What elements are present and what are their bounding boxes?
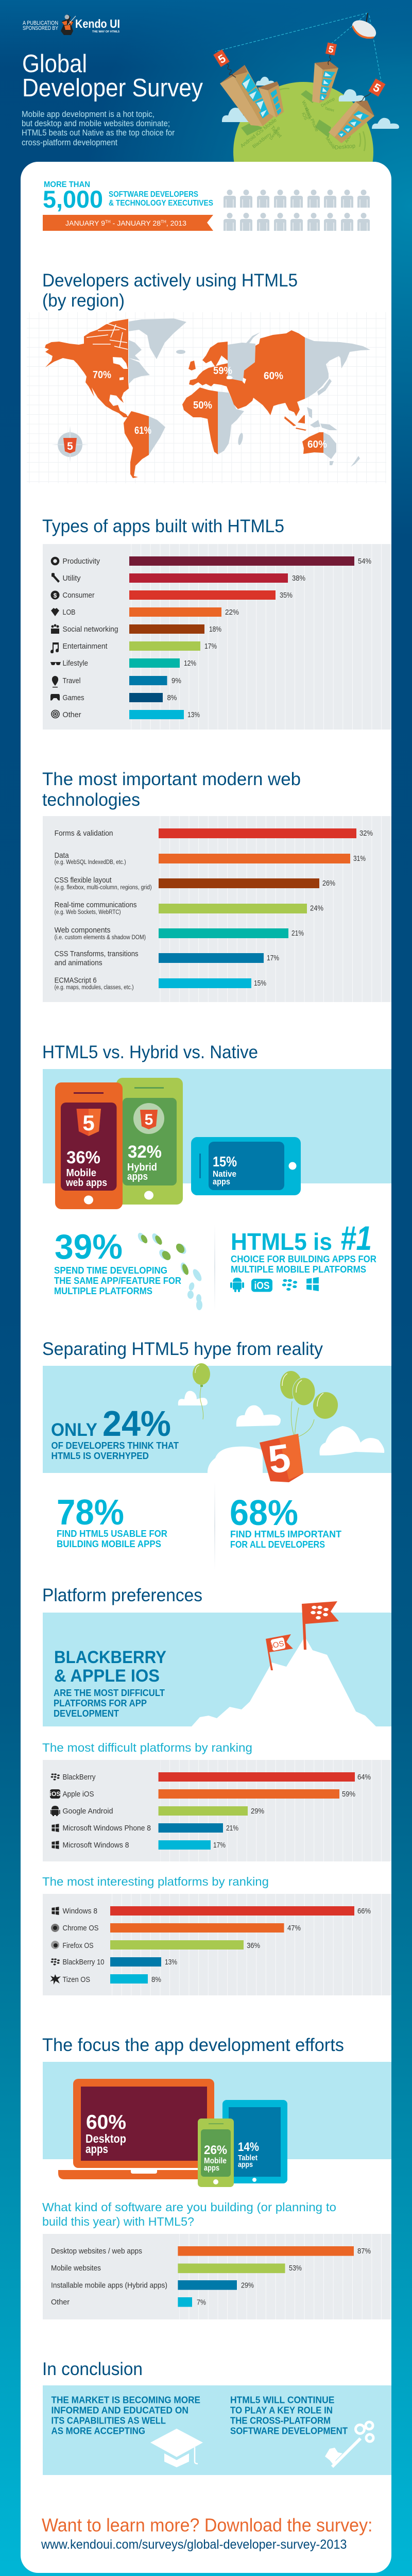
survey stat: 5,000 respondents: 5,000 bbox=[43, 185, 103, 213]
region percentages: 50% bbox=[193, 400, 212, 411]
bar chart: web technologies: 17% bbox=[267, 954, 279, 962]
bar chart: web technologies: 31% bbox=[353, 854, 366, 863]
conclusion text: right: TO PLAY A KEY ROLE IN bbox=[230, 2405, 333, 2415]
bar chart: kind of software: Mobile websites bbox=[51, 2264, 101, 2273]
HTML5 tags: 5 bbox=[328, 44, 335, 55]
call to action bbox=[41, 2514, 373, 2552]
tablet: tablet apps: 14% bbox=[238, 2140, 259, 2154]
planet: iOS bbox=[301, 112, 309, 121]
bar chart: most difficult platforms: Apple iOS bbox=[63, 1790, 94, 1799]
bar chart: most difficult platforms: 64% bbox=[357, 1773, 371, 1782]
bar chart: web technologies: (e.g. WebSQL IndexedDB, etc.) bbox=[55, 859, 126, 866]
sponsor logo: header bbox=[23, 14, 120, 35]
bar chart: kind of software: 7% bbox=[197, 2298, 206, 2307]
bars bbox=[129, 556, 354, 719]
phone: mobile apps: 26% bbox=[204, 2143, 227, 2157]
heading: focus of app development: The focus the app development efforts bbox=[42, 2035, 344, 2055]
survey stat: 5,000 respondents: SOFTWARE DEVELOPERS bbox=[109, 190, 198, 199]
divider bbox=[214, 1482, 215, 1570]
bar chart: most interesting platforms: Windows 8 bbox=[63, 1907, 97, 1916]
grey regions bbox=[129, 318, 370, 467]
phone: hybrid apps: Hybrid bbox=[127, 1162, 157, 1173]
values bbox=[167, 557, 371, 719]
bar chart: types of apps bbox=[43, 544, 391, 730]
intro text: cross-platform development bbox=[22, 138, 117, 147]
phone: hybrid apps: apps bbox=[127, 1171, 148, 1182]
HTML5 tags: 5 bbox=[371, 81, 383, 95]
category labels: Utility bbox=[63, 574, 81, 583]
icon: iOS: iOS bbox=[254, 1280, 270, 1292]
card bottom bbox=[21, 2524, 391, 2573]
text: blackberry and apple iOS: PLATFORMS FOR APP bbox=[54, 1698, 147, 1708]
stat: 68%: FOR ALL DEVELOPERS bbox=[230, 1539, 325, 1550]
planet: Windows Phone bbox=[301, 100, 320, 132]
conclusion text: right: THE CROSS-PLATFORM bbox=[230, 2415, 331, 2426]
stat: 39% multi-platform: MULTIPLE PLATFORMS bbox=[54, 1286, 152, 1296]
bar chart: kind of software: Other bbox=[51, 2298, 70, 2307]
phone: native apps: 15% bbox=[213, 1154, 237, 1170]
conclusion text: left: AS MORE ACCEPTING bbox=[52, 2426, 145, 2436]
values: 38% bbox=[292, 574, 305, 583]
compass HTML5 badge: 5 bbox=[67, 440, 73, 452]
values: 35% bbox=[280, 591, 293, 600]
bar chart: web technologies: Web components bbox=[55, 926, 111, 935]
date banner: , 2013 bbox=[166, 219, 186, 227]
bar chart: most difficult platforms bbox=[43, 1760, 391, 1861]
stat: HTML5 is #1: MULTIPLE MOBILE PLATFORMS bbox=[231, 1264, 366, 1275]
bar chart: web technologies: (i.e. custom elements & shadow DOM) bbox=[55, 935, 146, 941]
satellite links bbox=[215, 13, 381, 81]
heading: modern web technologies bbox=[42, 769, 301, 810]
region percentages: 70% bbox=[93, 369, 111, 381]
values: 13% bbox=[187, 710, 200, 719]
tablet: tablet apps bbox=[222, 2100, 287, 2183]
flag: iOS: iOS bbox=[270, 1639, 285, 1651]
balloon: small bbox=[193, 1363, 210, 1419]
phone: hybrid apps bbox=[116, 1078, 183, 1205]
HTML5 tags: 5 bbox=[216, 52, 228, 66]
subheading: what kind of software bbox=[42, 2200, 336, 2228]
building: large left bbox=[220, 65, 273, 126]
phone: mobile apps: apps bbox=[204, 2164, 219, 2173]
bar chart: web technologies: (e.g. flexbox, multi-column, regions, grid) bbox=[55, 885, 152, 891]
subheading: what kind of software: What kind of software are you building (or planning to bbox=[42, 2200, 336, 2214]
category labels: Other bbox=[63, 710, 81, 719]
bar chart: kind of software: 87% bbox=[357, 2247, 371, 2256]
category labels: Lifestyle bbox=[63, 659, 88, 668]
bar chart: web technologies: Data bbox=[55, 851, 69, 860]
building: centre bbox=[312, 61, 338, 103]
conclusion text: left: INFORMED AND EDUCATED ON bbox=[52, 2405, 188, 2415]
values: 22% bbox=[225, 608, 239, 617]
conclusion text: right: SOFTWARE DEVELOPMENT bbox=[230, 2426, 348, 2436]
survey stat: 5,000 respondents: MORE THAN bbox=[44, 180, 90, 189]
platform icons bbox=[230, 1277, 319, 1292]
planet: Desktop bbox=[320, 96, 336, 108]
category labels: Entertainment bbox=[63, 642, 108, 651]
values: 9% bbox=[171, 676, 181, 685]
category labels: Social networking bbox=[63, 625, 118, 634]
stat: HTML5 is #1 bbox=[231, 1219, 376, 1275]
icon: blackberry bbox=[282, 1279, 297, 1291]
text: blackberry and apple iOS: & APPLE IOS bbox=[54, 1666, 160, 1686]
icon: key bbox=[325, 2422, 373, 2467]
balloons with HTML5 shield bbox=[260, 1371, 340, 1482]
panel: difficult platforms bbox=[43, 1613, 391, 1726]
bar chart: web technologies: 15% bbox=[254, 979, 266, 988]
values: 17% bbox=[204, 642, 217, 651]
region percentages bbox=[93, 365, 327, 450]
bar chart: most difficult platforms: Microsoft Windows 8 bbox=[63, 1841, 129, 1850]
call to action: www.kendoui.com/surveys/global-developer-survey-2013 bbox=[41, 2537, 347, 2552]
conclusion text: right bbox=[230, 2395, 348, 2436]
stat: 39% multi-platform: 39% bbox=[55, 1227, 123, 1266]
clouds bbox=[222, 77, 399, 129]
title bbox=[22, 50, 203, 102]
springs bbox=[227, 55, 371, 101]
main white card bbox=[21, 162, 391, 512]
bar chart: web technologies: 26% bbox=[322, 879, 335, 888]
heading: platform preferences: Platform preferences bbox=[42, 1585, 202, 1605]
stat: HTML5 is #1: #1 bbox=[340, 1219, 372, 1257]
conclusion text: left: ITS CAPABILITIES AS WELL bbox=[52, 2415, 166, 2426]
phone: hybrid apps: 5 bbox=[145, 1111, 153, 1128]
values: 8% bbox=[167, 693, 177, 702]
bar chart: most interesting platforms: 13% bbox=[165, 1958, 177, 1967]
bar chart: most interesting platforms: Firefox OS bbox=[63, 1941, 94, 1950]
text: blackberry and apple iOS: ARE THE MOST DIFFICULT bbox=[54, 1688, 165, 1698]
date banner: TH bbox=[105, 219, 111, 224]
stat: 39% multi-platform bbox=[54, 1227, 181, 1296]
world map bbox=[27, 312, 386, 483]
building: small left bbox=[258, 81, 284, 117]
planet: Tablet bbox=[324, 107, 334, 113]
call to action: Want to learn more? Download the survey: bbox=[42, 2514, 373, 2536]
bar chart: kind of software: 53% bbox=[289, 2264, 302, 2273]
people icons bbox=[224, 190, 370, 231]
category labels: Travel bbox=[63, 676, 80, 685]
bar chart: most interesting platforms: Chrome OS bbox=[63, 1924, 99, 1933]
conclusion text: left bbox=[52, 2395, 200, 2436]
bar chart: kind of software: Installable mobile apps (Hybrid apps) bbox=[51, 2281, 167, 2290]
stat: 39% multi-platform: THE SAME APP/FEATURE FOR bbox=[54, 1276, 181, 1286]
bar chart: kind of software: Desktop websites / web apps bbox=[51, 2247, 142, 2256]
heading: developers by region: (by region) bbox=[42, 291, 125, 311]
conclusion text: left: THE MARKET IS BECOMING MORE bbox=[52, 2395, 200, 2405]
bar chart: most difficult platforms: BlackBerry bbox=[63, 1773, 96, 1782]
icons bbox=[50, 558, 61, 718]
text: only 24%: 24% bbox=[102, 1403, 171, 1444]
survey stat: 5,000 respondents bbox=[43, 180, 213, 213]
planet: Android bbox=[344, 129, 355, 144]
intro text: Mobile app development is a hot topic, bbox=[22, 109, 154, 119]
building: right bbox=[329, 100, 374, 143]
date banner: - JANUARY 28 bbox=[111, 219, 161, 227]
bar chart: most interesting platforms: 8% bbox=[151, 1975, 161, 1984]
conclusion text: right: HTML5 WILL CONTINUE bbox=[230, 2395, 335, 2405]
bar chart: web technologies: 32% bbox=[359, 829, 373, 838]
heading: in conclusion: In conclusion bbox=[42, 2359, 143, 2379]
icon: android bbox=[230, 1278, 244, 1292]
bar chart: most difficult platforms: Microsoft Windows Phone 8 bbox=[63, 1824, 151, 1833]
tablet: tablet apps: Tablet bbox=[238, 2154, 258, 2162]
icon: graduation cap bbox=[150, 2429, 203, 2467]
panel: development focus bbox=[43, 2062, 391, 2159]
bar chart: most difficult platforms: 59% bbox=[342, 1790, 355, 1799]
intro text bbox=[22, 109, 175, 147]
phone: mobile web apps: 5 bbox=[82, 1111, 95, 1135]
heading: hype vs reality: Separating HTML5 hype from reality bbox=[42, 1339, 323, 1359]
flag: iOS bbox=[266, 1634, 293, 1670]
text: blackberry and apple iOS: DEVELOPMENT bbox=[54, 1708, 119, 1719]
illustration: planet with buildings and satellite bbox=[213, 13, 399, 222]
phone: hybrid apps: 32% bbox=[128, 1142, 162, 1162]
balloons with HTML5 shield: 5 bbox=[266, 1436, 293, 1482]
panel: overhyped bbox=[43, 1366, 391, 1473]
flag: blackberry bbox=[302, 1601, 339, 1650]
bar chart: most difficult platforms: 29% bbox=[251, 1807, 264, 1816]
phone: native apps: Native bbox=[213, 1169, 236, 1179]
bar chart: web technologies: CSS Transforms, transitions bbox=[55, 950, 139, 958]
phone: mobile apps bbox=[198, 2119, 234, 2187]
title: Global bbox=[22, 50, 87, 78]
stat: 78%: 78% bbox=[57, 1492, 124, 1532]
title: Developer Survey bbox=[22, 74, 203, 102]
category labels: LOB bbox=[63, 608, 75, 617]
divider bbox=[214, 1225, 215, 1310]
laptop: desktop apps: Desktop bbox=[85, 2132, 126, 2145]
planet: Mobile bbox=[324, 135, 337, 150]
bar chart: most difficult platforms: Google Android bbox=[63, 1807, 113, 1816]
text: only 24%: HTML5 IS OVERHYPED bbox=[52, 1451, 149, 1461]
subheading: what kind of software: build this year) with HTML5? bbox=[42, 2215, 194, 2228]
text: only 24%: ONLY bbox=[51, 1420, 97, 1440]
stat: HTML5 is #1: HTML5 is bbox=[231, 1228, 332, 1255]
bar chart: most difficult platforms: iOS bbox=[50, 1790, 60, 1798]
region percentages: 60% bbox=[264, 370, 283, 382]
stat: 68%: 68% bbox=[230, 1493, 298, 1533]
satellite bbox=[349, 13, 379, 43]
compass HTML5 badge bbox=[52, 426, 89, 463]
region percentages: 59% bbox=[213, 365, 232, 377]
icon: footprints bbox=[136, 1231, 203, 1310]
values: 12% bbox=[184, 659, 196, 668]
bar chart: most difficult platforms: 21% bbox=[226, 1824, 238, 1833]
bar chart: web technologies: ECMAScript 6 bbox=[55, 976, 97, 985]
text: blackberry and apple iOS bbox=[54, 1648, 166, 1719]
text: blackberry and apple iOS: BLACKBERRY bbox=[54, 1648, 166, 1667]
sponsor logo: header: A PUBLICATION bbox=[23, 20, 58, 26]
phone: mobile web apps bbox=[55, 1082, 123, 1209]
stat: 78%: FIND HTML5 USABLE FOR bbox=[57, 1529, 167, 1539]
bar chart: most interesting platforms: 66% bbox=[357, 1907, 371, 1916]
region percentages: 61% bbox=[134, 425, 151, 436]
mountain with flags bbox=[192, 1601, 376, 1726]
planet: Android iOS Mobile bbox=[239, 117, 278, 149]
heading: HTML5 vs Hybrid vs Native: HTML5 vs. Hybrid vs. Native bbox=[42, 1042, 258, 1062]
laptop: desktop apps: 60% bbox=[86, 2111, 126, 2133]
category labels: Games bbox=[63, 693, 84, 702]
text: only 24%: OF DEVELOPERS THINK THAT bbox=[52, 1440, 179, 1451]
heading: modern web technologies: technologies bbox=[42, 790, 140, 810]
heading: developers by region bbox=[42, 270, 298, 311]
bar chart: kind of software: 29% bbox=[241, 2281, 254, 2290]
bar chart: kind of software bbox=[43, 2234, 391, 2319]
HTML5 tags bbox=[213, 42, 386, 97]
bar chart: most interesting platforms: 36% bbox=[247, 1941, 260, 1950]
sponsor logo: header: THE WAY OF HTML5 bbox=[92, 30, 119, 33]
phone: mobile web apps: 36% bbox=[66, 1148, 100, 1167]
date banner: JANUARY 9 bbox=[65, 219, 105, 227]
bar chart: web technologies: (e.g. maps, modules, classes, etc.) bbox=[55, 985, 134, 991]
planet: Desktop bbox=[268, 125, 281, 141]
planet: Tablet bbox=[269, 125, 283, 139]
bar chart: web technologies: Real-time communications bbox=[55, 901, 137, 909]
survey stat: 5,000 respondents: & TECHNOLOGY EXECUTIVES bbox=[109, 199, 213, 208]
clouds: hype panel bbox=[178, 1391, 384, 1473]
laptop: desktop apps bbox=[58, 2079, 214, 2179]
icons: $ bbox=[54, 592, 57, 599]
panel: app type comparison bbox=[43, 1069, 391, 1183]
white seas and arctic cracks bbox=[113, 357, 246, 384]
intro text: but desktop and mobile websites dominate; bbox=[22, 118, 170, 128]
bar chart: web technologies: Forms & validation bbox=[55, 829, 113, 838]
phone: native apps: apps bbox=[213, 1177, 230, 1187]
category labels bbox=[63, 557, 118, 719]
bar chart: most interesting platforms: BlackBerry 10 bbox=[63, 1958, 104, 1967]
panel: conclusion bbox=[43, 2385, 391, 2475]
bar chart: web technologies: (e.g. Web Sockets, WebRTC) bbox=[55, 909, 121, 916]
intro text: HTML5 beats out Native as the top choice for bbox=[22, 128, 175, 138]
values: 18% bbox=[209, 625, 221, 634]
planet: Mobile bbox=[304, 107, 312, 121]
values: 54% bbox=[358, 557, 371, 566]
heading: modern web technologies: The most important modern web bbox=[42, 769, 301, 789]
heading: developers by region: Developers actively using HTML5 bbox=[42, 270, 298, 291]
tablet: tablet apps: apps bbox=[238, 2160, 253, 2169]
stat: HTML5 is #1: CHOICE FOR BUILDING APPS FOR bbox=[231, 1254, 376, 1264]
stat: 39% multi-platform: SPEND TIME DEVELOPING bbox=[54, 1265, 167, 1276]
sponsor logo: header: Kendo UI bbox=[75, 17, 120, 30]
phone: mobile apps: Mobile bbox=[204, 2157, 227, 2165]
heading: types of apps: Types of apps built with HTML5 bbox=[42, 516, 284, 536]
stat: 78% bbox=[57, 1492, 167, 1549]
category labels: Consumer bbox=[63, 591, 95, 600]
text: only 24% bbox=[51, 1403, 179, 1461]
bar chart: web technologies: CSS flexible layout bbox=[55, 876, 112, 885]
bar chart: web technologies: 21% bbox=[291, 929, 304, 938]
phone: mobile web apps: Mobile bbox=[66, 1167, 96, 1179]
planet: BlackBerry bbox=[251, 131, 272, 149]
laptop: desktop apps: apps bbox=[85, 2142, 108, 2156]
bar chart: most interesting platforms: 47% bbox=[287, 1924, 301, 1933]
date banner: TH bbox=[161, 219, 166, 224]
bar chart: web technologies: 24% bbox=[310, 904, 323, 913]
category labels: Productivity bbox=[63, 557, 100, 566]
stat: 78%: BUILDING MOBILE APPS bbox=[57, 1539, 161, 1549]
bar chart: most interesting platforms: Tizen OS bbox=[63, 1975, 90, 1984]
orange regions bbox=[45, 319, 323, 478]
date banner bbox=[43, 215, 213, 231]
bar chart: web technologies bbox=[43, 816, 391, 1002]
bar chart: most difficult platforms: 17% bbox=[213, 1841, 226, 1850]
stat: 68% bbox=[230, 1493, 341, 1550]
region percentages: 60% bbox=[307, 439, 327, 450]
icon: windows bbox=[306, 1277, 319, 1291]
bar chart: web technologies: and animations bbox=[55, 959, 102, 968]
subheading: most difficult: The most difficult platforms by ranking bbox=[42, 1741, 252, 1754]
sponsor logo: header: SPONSORED BY bbox=[23, 25, 59, 31]
planet bbox=[233, 82, 373, 222]
bar chart: most interesting platforms bbox=[43, 1894, 391, 1995]
subheading: most interesting: The most interesting platforms by ranking bbox=[42, 1875, 269, 1888]
planet: Desktop bbox=[334, 143, 355, 151]
phone: native apps bbox=[191, 1137, 301, 1195]
phone: mobile web apps: web apps bbox=[65, 1177, 107, 1189]
stat: 68%: FIND HTML5 IMPORTANT bbox=[230, 1529, 341, 1539]
